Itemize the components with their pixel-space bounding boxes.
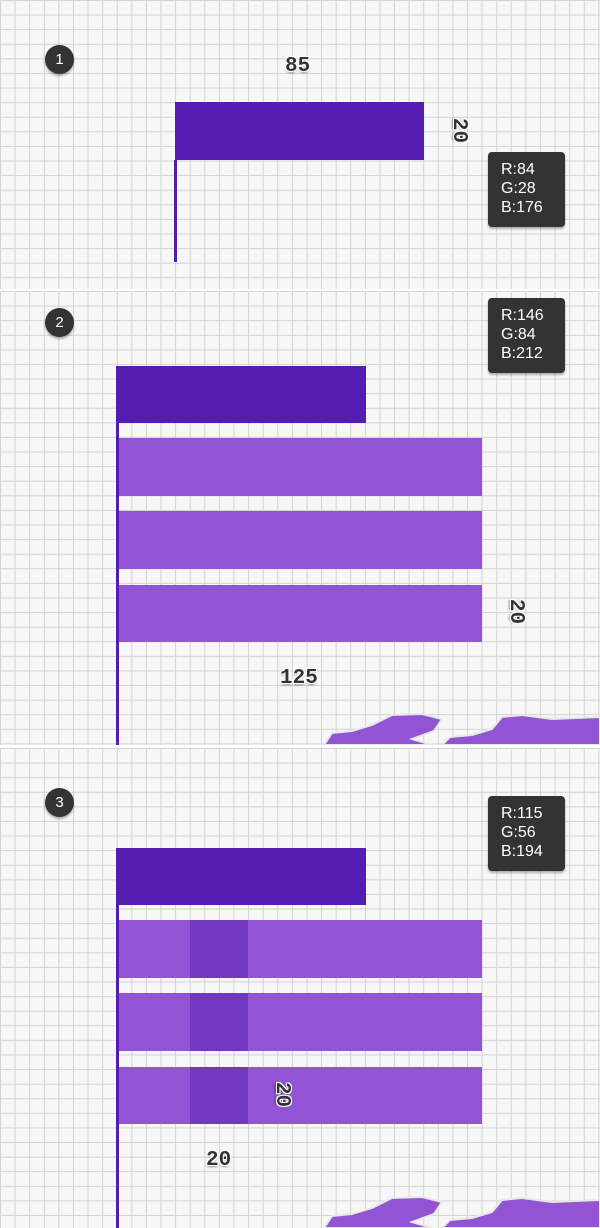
color box [488,796,565,871]
color box: G:84 [501,326,536,343]
light bar 2 [116,993,482,1051]
label 20 rotated: 20 [504,599,527,624]
color box: R:115 [501,805,543,822]
step badge 2 [45,308,74,337]
panel 3 [0,748,600,1228]
color box: R:84 [501,161,535,178]
dark bar [116,848,366,905]
color box: G:56 [501,824,536,841]
mid stripe 3 [190,1067,248,1124]
paint splash [323,1196,600,1228]
label 85: 85 [285,55,310,78]
axis line [116,423,119,745]
step badge 2: 2 [55,314,64,331]
color box: B:212 [501,345,543,362]
label 20 rotated: 20 [447,118,470,143]
mid stripe 2 [190,993,248,1051]
axis line [116,905,119,1228]
step badge 1: 1 [55,51,64,68]
bars [116,848,482,1124]
light bar 3 [116,1067,482,1124]
light bar 1 [116,438,482,496]
paint splash [323,713,600,745]
dark bar [116,366,366,423]
panel 2 [0,291,600,745]
step badge 3: 3 [55,794,64,811]
label 125: 125 [280,667,318,690]
dark bar [175,102,424,160]
bars [116,366,482,642]
step badge 3 [45,788,74,817]
color box [488,152,565,227]
axis line [174,160,177,262]
color box: B:176 [501,199,543,216]
mid stripe 1 [190,920,248,978]
light bar 2 [116,511,482,569]
color box: B:194 [501,843,543,860]
light bar 1 [116,920,482,978]
step badge 1 [45,45,74,74]
color box: G:28 [501,180,536,197]
panel 1 [0,0,600,289]
label 20 rotated: 20 [270,1082,293,1107]
light bar 3 [116,585,482,642]
label 20: 20 [206,1149,231,1172]
color box [488,298,565,373]
color box: R:146 [501,307,544,324]
